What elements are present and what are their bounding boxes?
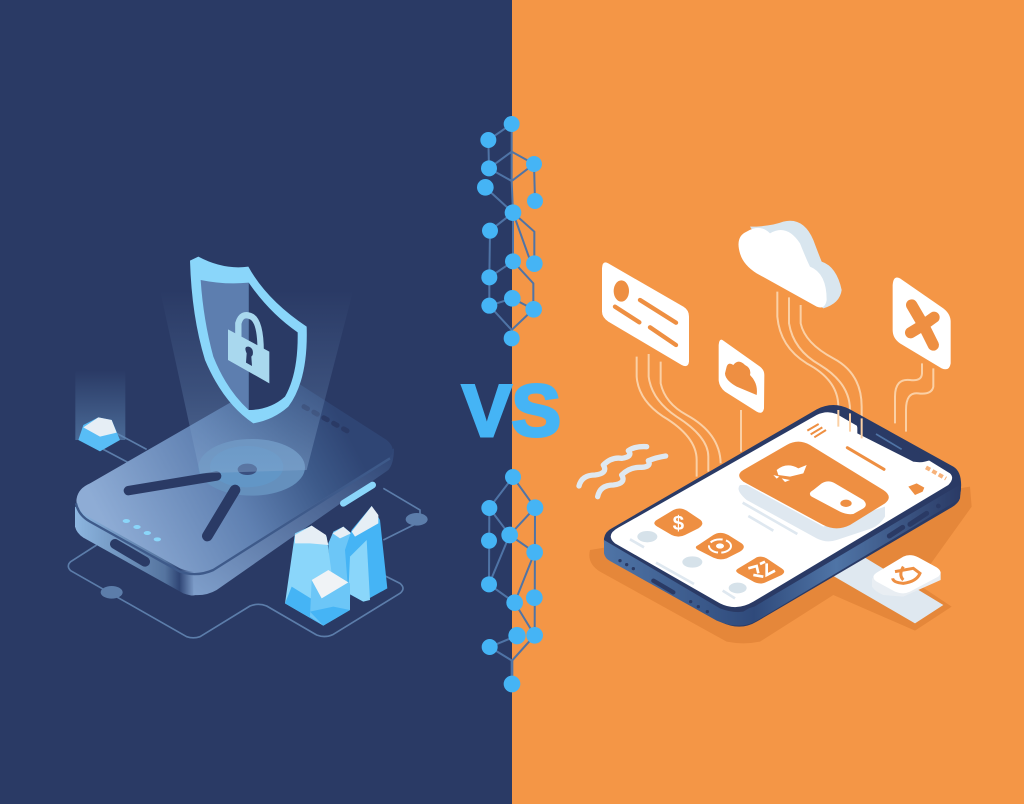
padlock shackle [238, 315, 261, 352]
dollar symbol: $ [673, 512, 685, 535]
notch [857, 421, 929, 462]
crystal middle [328, 527, 352, 600]
circuit node: lower left [101, 586, 123, 599]
phone side right [193, 448, 394, 595]
padlock keyhole [245, 347, 253, 366]
bottom port [653, 581, 673, 592]
wallet dot [840, 500, 852, 507]
cloud face [738, 228, 827, 307]
chart app tile [736, 557, 784, 583]
shield inner left half [201, 280, 249, 410]
phone top face [76, 378, 393, 572]
shield frame [190, 257, 307, 423]
panel: right orange background [512, 0, 1024, 804]
large cloud [738, 221, 842, 308]
shield inner right half [249, 283, 298, 410]
circuit node: right [406, 513, 428, 526]
chart icon [748, 562, 775, 577]
tile cloud icon [725, 362, 757, 395]
light beam behind shield [160, 290, 353, 473]
tile base [893, 277, 951, 369]
circuit lines [68, 433, 420, 638]
cube light column [75, 370, 125, 440]
side buttons [889, 513, 927, 536]
tile side [872, 572, 941, 597]
propeller tile [893, 277, 951, 369]
speaker dots [304, 407, 353, 434]
security shield [190, 257, 307, 423]
text lines [630, 503, 797, 598]
tile [736, 557, 784, 583]
cube top [83, 417, 117, 437]
hero icon [773, 465, 807, 482]
cloud tile [719, 340, 764, 413]
phone side band [604, 482, 961, 626]
grey avatars [637, 531, 747, 593]
illustration: secure phone with shield [68, 257, 428, 638]
slip paper [832, 557, 943, 623]
phone body [75, 378, 394, 596]
lower chain nodes [481, 469, 543, 692]
dollar app tile [654, 508, 702, 537]
dark bar long [128, 476, 217, 491]
card lines [615, 300, 676, 345]
propeller icon [911, 305, 934, 345]
crystal tall right [345, 506, 387, 602]
upper chain links [485, 124, 535, 338]
notch speaker [876, 434, 902, 449]
panel: left navy background [0, 0, 512, 804]
cloud depth [750, 221, 842, 308]
crystal front [310, 570, 350, 626]
small app tile under phone [832, 555, 943, 623]
tile base [719, 340, 764, 413]
tile [696, 533, 744, 559]
wavy lines [579, 447, 666, 497]
camera dots [618, 504, 941, 613]
charging port [115, 544, 145, 562]
crystal tall left [285, 526, 350, 626]
exchange app tile [696, 533, 744, 559]
menu icon [807, 424, 826, 437]
contact card [602, 262, 689, 366]
phone bottom edge rim [607, 482, 958, 606]
card base [602, 262, 689, 366]
cube body [78, 417, 120, 451]
scan circle [198, 439, 305, 496]
upper chain nodes [477, 116, 543, 346]
indicator lights [123, 519, 161, 541]
illustration: connected phone with apps [579, 221, 972, 643]
lines over phone top [838, 410, 862, 438]
tile logo [893, 567, 920, 583]
phone front shadow line [76, 458, 390, 574]
padlock body [228, 329, 269, 383]
tile top [873, 555, 940, 593]
scan center dot [238, 464, 257, 475]
hero card shadow [738, 485, 885, 541]
exchange icon [709, 539, 731, 553]
ice crystals [285, 506, 387, 626]
phone casing [604, 405, 961, 627]
VS label: VS [462, 371, 561, 452]
scan glow [210, 446, 283, 487]
wallet card [810, 481, 866, 514]
small glowing cube [75, 370, 125, 451]
padlock [228, 315, 269, 383]
side button [343, 485, 373, 503]
phone ground shadow [589, 487, 972, 643]
status avatar [908, 483, 924, 495]
lower chain links [489, 477, 535, 684]
smartphone [604, 405, 961, 627]
dark bar short [207, 490, 235, 536]
hero card [739, 442, 889, 528]
network chain: lower [481, 469, 543, 692]
network chain: upper [477, 116, 543, 346]
tile [654, 508, 702, 537]
phone screen [611, 412, 952, 607]
cable lines [637, 292, 933, 477]
header line [847, 448, 884, 469]
card avatar [614, 280, 629, 302]
phone side left [75, 507, 195, 596]
status dots [926, 467, 946, 479]
